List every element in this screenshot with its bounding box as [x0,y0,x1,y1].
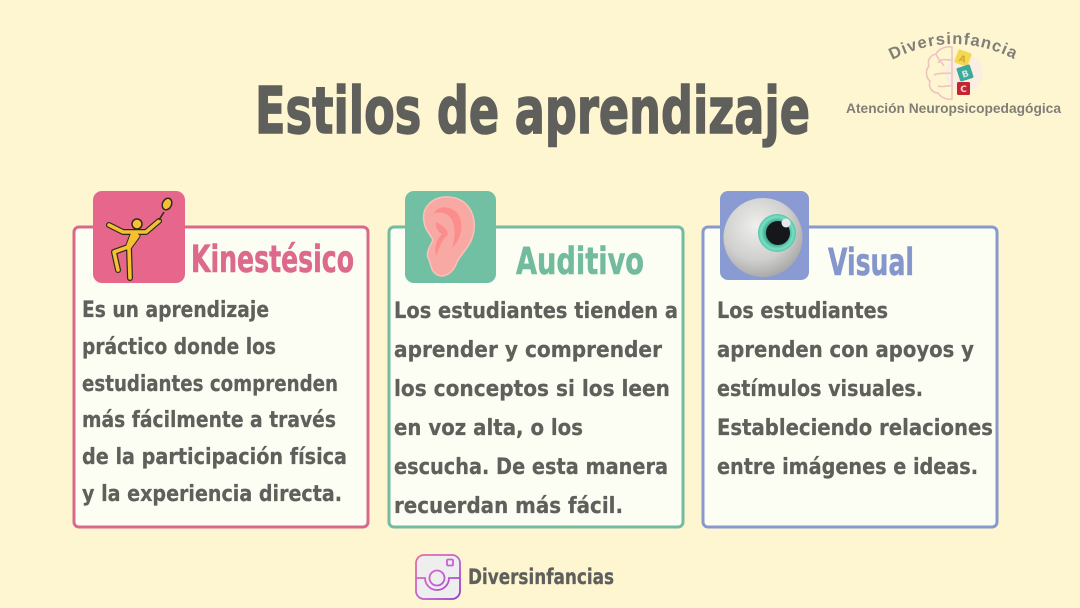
description text: estímulos visuales. [717,377,923,402]
logo block B [956,64,974,82]
description text: en voz alta, o los [394,416,583,441]
logo brain [926,47,952,99]
logo backdrop [945,54,983,92]
description text: los conceptos si los leen [394,377,670,402]
description text: más fácilmente a través [82,408,336,433]
description text [394,299,678,519]
description text: Es un aprendizaje [82,298,269,323]
description text [82,298,347,507]
logo block A [954,49,972,67]
logo block A: A [957,54,967,66]
description text: Los estudiantes [717,299,888,324]
panel: Kinestésico [74,191,368,527]
card frame [74,227,368,527]
description text: aprender y comprender [394,338,662,363]
description text: práctico donde los [82,335,276,360]
icon: Instagram [416,555,460,599]
description text: y la experiencia directa. [82,482,342,507]
heading: Auditivo: Auditivo [516,240,644,283]
footer: Instagram handle [416,555,614,599]
card frame [389,227,683,527]
logo: Diversinfancia [846,32,1062,116]
description text: recuerdan más fácil. [394,494,623,519]
logo arched name [892,44,1016,60]
logo block B: B [961,69,971,81]
description text: aprenden con apoyos y [717,338,974,363]
logo tagline: Atención Neuropsicopedagógica [846,101,1061,116]
icon: eye [720,191,809,280]
description text: escucha. De esta manera [394,455,668,480]
icon: badminton player [93,191,185,283]
logo block C: C [960,85,967,95]
logo block C [957,82,970,95]
handle text: Diversinfancias [468,565,614,589]
description text: Los estudiantes tienden a [394,299,678,324]
card frame [703,227,997,527]
description text: entre imágenes e ideas. [717,455,978,480]
description text [717,299,993,480]
heading: Kinestésico: Kinestésico [191,238,354,281]
title: Estilos de aprendizaje [255,75,810,149]
panel: Auditivo [389,191,683,527]
description text: de la participación física [82,445,347,470]
description text: Estableciendo relaciones [717,416,993,441]
description text: estudiantes comprenden [82,372,338,397]
logo: Diversinfancia: Diversinfancia [888,32,1016,60]
icon: ear [405,191,496,283]
panel: Visual [703,191,997,527]
heading: Visual: Visual [828,241,914,284]
